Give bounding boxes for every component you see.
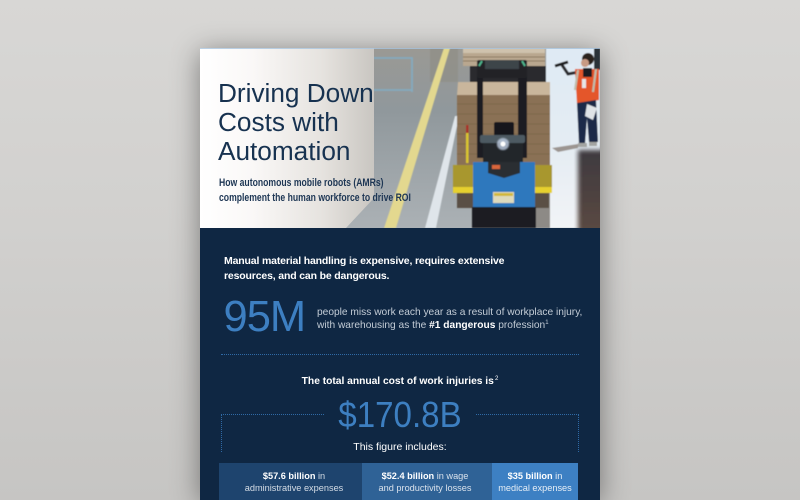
segment: administrative expenses: administrative expenses (245, 483, 343, 493)
title: Driving Down (218, 78, 374, 108)
dotted bracket left (221, 414, 324, 452)
segment: wage and productivity losses (362, 463, 492, 500)
rack (373, 58, 412, 92)
subtitle: How autonomous mobile robots (AMRs) (219, 176, 384, 188)
dotted bracket right (476, 414, 579, 452)
intro statement (224, 255, 504, 282)
cardboard stack (457, 82, 550, 95)
segment: medical expenses: $35 billion in (508, 471, 562, 481)
worker (582, 53, 594, 65)
stat description (317, 306, 582, 330)
title: Automation (218, 136, 350, 166)
sensor head (494, 122, 514, 136)
subtitle: complement the human workforce to drive ROI (219, 192, 411, 204)
label: this figure includes: This figure includes: (353, 440, 447, 452)
title (218, 78, 374, 166)
intro statement: resources, and can be dangerous. (224, 270, 389, 282)
heading: total annual cost: The total annual cost of work injuries is 2 (302, 376, 498, 387)
cost breakdown bar (219, 463, 578, 500)
stat: 95M: 95M (224, 293, 305, 341)
mast (477, 64, 483, 158)
intro statement: Manual material handling is expensive, requires extensive (224, 255, 504, 267)
divider (221, 354, 579, 355)
segment: medical expenses: medical expenses (498, 483, 572, 493)
segment: administrative expenses (219, 463, 362, 500)
stat description: with warehousing as the #1 dangerous profession1 (317, 320, 549, 330)
subtitle (219, 176, 411, 204)
back pallet (463, 48, 545, 66)
segment: wage and productivity losses: and productivity losses (379, 483, 471, 493)
white fade panel (200, 48, 374, 194)
segment: administrative expenses: $57.6 billion in (263, 471, 325, 481)
blue robot body (473, 162, 535, 207)
segment: wage and productivity losses: $52.4 billion in wage (382, 471, 468, 481)
stat: $170.8B: $170.8B (338, 394, 462, 435)
title: Costs with (218, 107, 339, 137)
stripes (384, 48, 450, 228)
yellow post and forks (466, 125, 468, 163)
stat description: people miss work each year as a result of workplace injury, (317, 306, 582, 318)
segment: medical expenses (492, 463, 578, 500)
right bright floor (546, 48, 600, 228)
hero photo: warehouse robot with worker (200, 48, 600, 228)
panel: infographic page (200, 48, 600, 500)
